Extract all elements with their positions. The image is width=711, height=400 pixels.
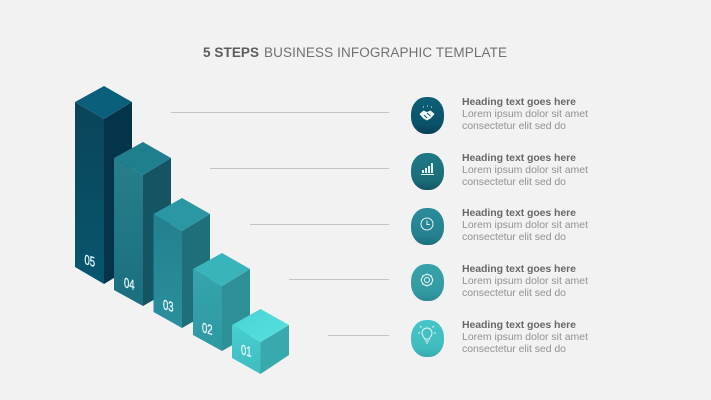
step row 04 — [411, 152, 588, 190]
icon: bar chart — [411, 153, 444, 190]
bar 05: 05 — [84, 251, 95, 271]
text block: consectetur elit sed do — [462, 343, 566, 355]
text block: Lorem ipsum dolor sit amet — [462, 164, 588, 176]
text block: Lorem ipsum dolor sit amet — [462, 108, 588, 120]
connector line 1 — [328, 334, 389, 336]
bar 05 — [75, 86, 132, 284]
step row 03 — [411, 207, 588, 245]
text block: Lorem ipsum dolor sit amet — [462, 219, 588, 231]
bar 02 — [193, 253, 250, 351]
step row 05 — [411, 96, 588, 134]
connector line 2 — [289, 278, 389, 280]
text block — [462, 319, 588, 355]
bar 03: 03 — [163, 296, 174, 316]
text block: Heading text goes here — [462, 319, 576, 331]
step row 01 — [411, 319, 588, 357]
text block: consectetur elit sed do — [462, 120, 566, 132]
text block: Heading text goes here — [462, 263, 576, 275]
text block: Heading text goes here — [462, 152, 576, 164]
text block: Lorem ipsum dolor sit amet — [462, 331, 588, 343]
text block: consectetur elit sed do — [462, 176, 566, 188]
step row 02 — [411, 263, 588, 301]
text block: consectetur elit sed do — [462, 287, 566, 299]
connector line 4 — [210, 168, 389, 170]
text block: Lorem ipsum dolor sit amet — [462, 275, 588, 287]
bar 04: 04 — [124, 274, 135, 294]
text block — [462, 263, 588, 299]
icon: light bulb — [411, 320, 444, 357]
bar 01 — [232, 309, 289, 374]
connector line 3 — [250, 224, 389, 226]
icon: clock — [411, 208, 444, 245]
text block: Heading text goes here — [462, 207, 576, 219]
bar chart: isometric steps — [75, 86, 289, 374]
connector line 5 — [171, 112, 389, 114]
bar 02: 02 — [202, 319, 213, 339]
text block — [462, 96, 588, 132]
title: 5 STEPS — [203, 45, 259, 60]
text block — [462, 207, 588, 243]
icon: gear — [411, 264, 444, 301]
text block — [462, 152, 588, 188]
bar 01: 01 — [241, 341, 252, 361]
title: BUSINESS INFOGRAPHIC TEMPLATE — [264, 45, 507, 60]
bar 03 — [154, 198, 210, 328]
text block: Heading text goes here — [462, 96, 576, 108]
bar 04 — [114, 142, 171, 306]
text block: consectetur elit sed do — [462, 231, 566, 243]
icon: handshake — [411, 97, 444, 134]
